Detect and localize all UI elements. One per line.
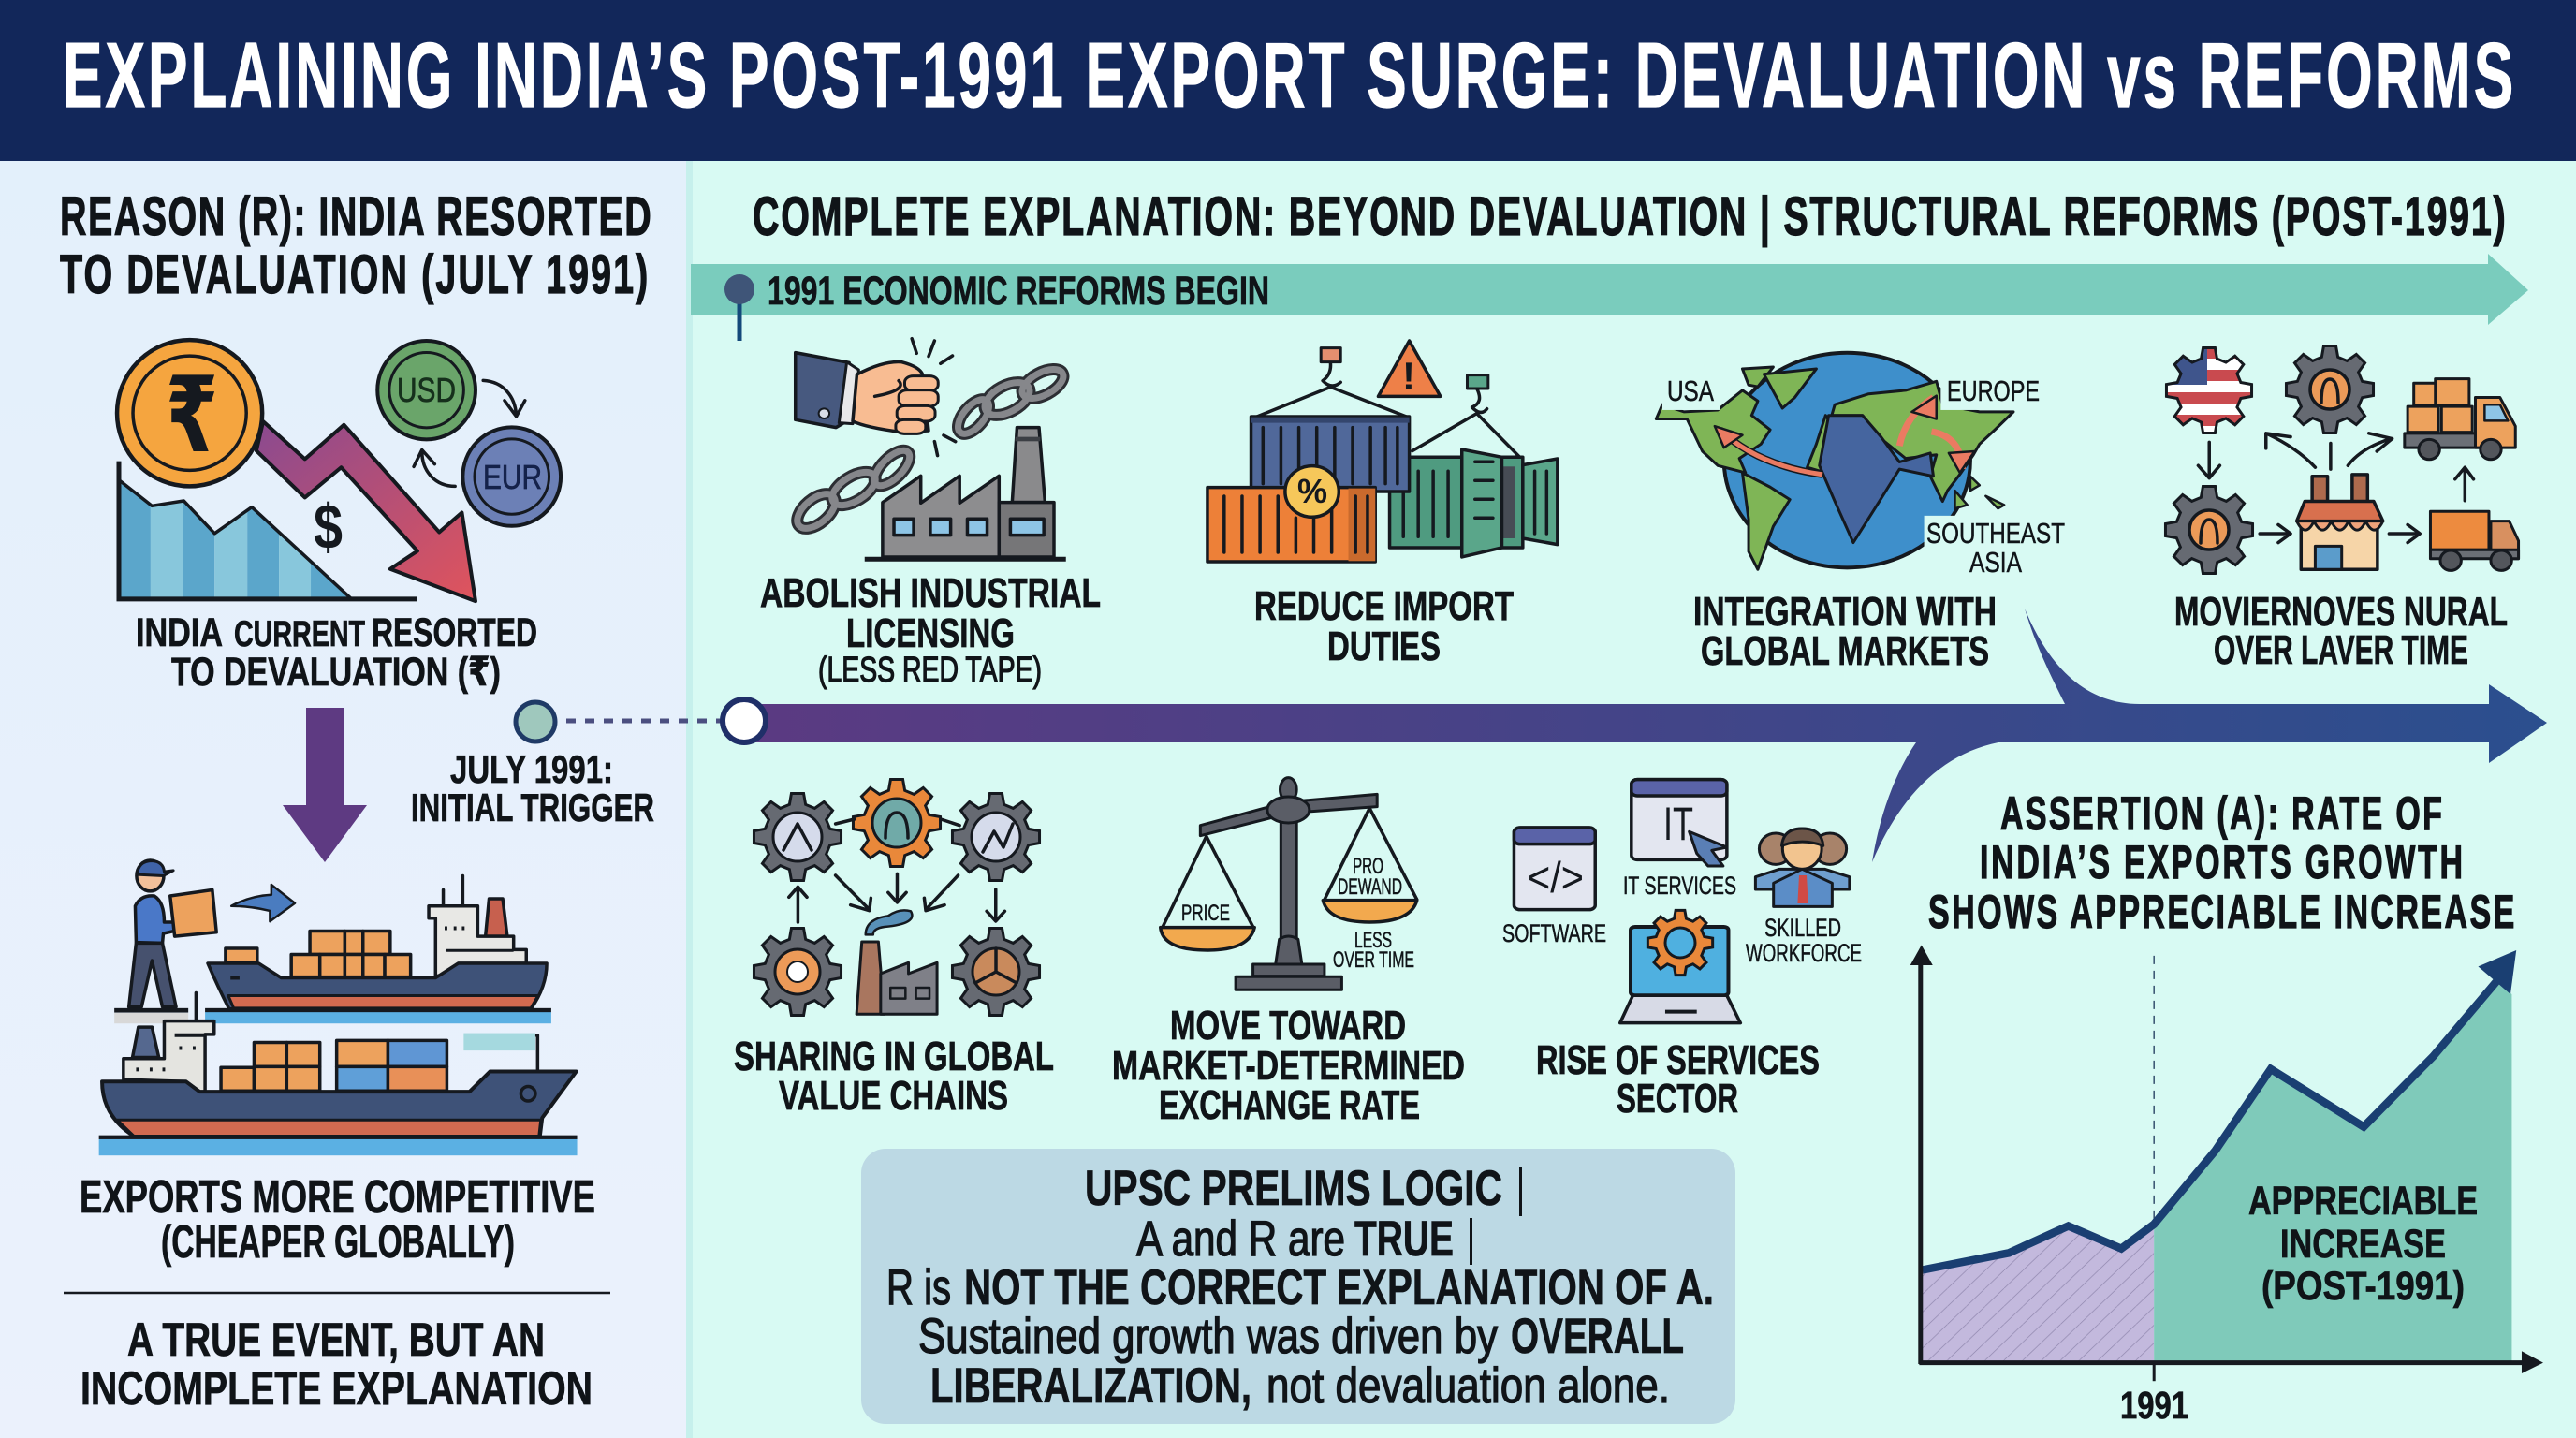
panel: assertion: [1910, 788, 2543, 1427]
label: GLOBAL MARKETS: [1701, 628, 1989, 674]
label: [2174, 589, 2508, 673]
label: india resorted to devaluation: TO DEVALUATION (₹): [171, 650, 501, 695]
label: ABOLISH INDUSTRIAL: [760, 570, 1101, 616]
label: INTEGRATION WITH: [1693, 589, 1997, 635]
icon: fist breaking chain and factory: [791, 339, 1068, 559]
icon: falling rupee chart: $: [314, 492, 343, 563]
heading: assertion: [1928, 788, 2514, 939]
label: EXCHANGE RATE: [1159, 1082, 1420, 1128]
chart: export growth area chart: [1910, 945, 2543, 1427]
icon: balance scale: LESS: [1354, 928, 1392, 953]
label: SHARING IN GLOBAL: [734, 1034, 1054, 1079]
icon: software, IT, workforce and laptop: IT: [1663, 798, 1693, 850]
label: july 1991 initial trigger: JULY 1991:: [450, 747, 613, 791]
reform: integration with global markets: [1656, 353, 2067, 674]
label: exports more competitive: (CHEAPER GLOBALLY): [161, 1217, 515, 1268]
arrow: 1991 economic reforms timeline: 1991 ECONOMIC REFORMS BEGIN: [768, 269, 1269, 314]
label: RISE OF SERVICES: [1536, 1037, 1820, 1083]
icon: falling rupee chart: USD: [397, 371, 456, 409]
label: MARKET-DETERMINED: [1112, 1043, 1465, 1089]
icon: software, IT, workforce and laptop: SKILLED: [1764, 914, 1841, 942]
icon: globe with trade arrows: USA: [1667, 374, 1714, 407]
reform: supply network over time: [2162, 345, 2519, 673]
icon: worker and cargo ships: [99, 860, 578, 1155]
heading: assertion: ASSERTION (A): RATE OF: [2000, 788, 2442, 841]
label: [1693, 589, 1997, 674]
icon: software, IT, workforce and laptop: IT SERVICES: [1623, 872, 1736, 900]
arrow: devaluation to exports: [283, 708, 367, 862]
icon: balance scale: PRO: [1353, 854, 1383, 879]
icon: globe with trade arrows: [1656, 353, 2067, 579]
chart: export growth area chart: (POST-1991): [2261, 1264, 2465, 1309]
conclusion text: incomplete explanation: A TRUE EVENT, BUT AN: [127, 1313, 545, 1366]
label: LICENSING: [846, 610, 1015, 656]
callout: UPSC prelims logic: TRUE: [1354, 1211, 1454, 1267]
icon: software, IT, workforce and laptop: SOFTWARE: [1502, 919, 1606, 947]
label: [1112, 1003, 1465, 1128]
icon: falling rupee chart: EUR: [483, 458, 542, 496]
panel: reason (left column): [0, 161, 693, 1438]
label: VALUE CHAINS: [779, 1073, 1008, 1119]
label: [760, 570, 1101, 690]
reform: market-determined exchange rate: [1112, 778, 1465, 1128]
callout: UPSC prelims logic: NOT THE CORRECT EXPLANATION OF A.: [964, 1260, 1714, 1315]
title banner: EXPLAINING INDIA’S POST-1991 EXPORT SURGE: DEVALUATION vs REFORMS: [63, 23, 2513, 126]
label: july 1991 initial trigger: INITIAL TRIGGER: [411, 785, 654, 829]
label: india resorted to devaluation: RESORTED: [372, 610, 537, 655]
label: [734, 1034, 1054, 1119]
icon: software, IT, workforce and laptop: [1502, 780, 1862, 1023]
reform: sharing in global value chains: [734, 779, 1054, 1119]
label: SECTOR: [1617, 1076, 1738, 1122]
label: india resorted to devaluation: CURRENT: [234, 614, 365, 654]
callout: UPSC prelims logic: A and R are: [1136, 1211, 1345, 1267]
connector: dashed link from initial trigger: [516, 702, 721, 741]
callout: UPSC prelims logic: UPSC PRELIMS LOGIC: [1085, 1161, 1502, 1216]
icon: balance scale: OVER TIME: [1333, 947, 1414, 973]
callout: UPSC prelims logic: LIBERALIZATION,: [930, 1358, 1251, 1414]
icon: containers with duty badge: !: [1402, 354, 1415, 398]
arrow: 1991 economic reforms timeline: [691, 254, 2528, 341]
label: india resorted to devaluation: [136, 610, 537, 695]
chart: export growth area chart: INCREASE: [2280, 1222, 2446, 1267]
callout: UPSC prelims logic: Sustained growth was driven by: [918, 1309, 1498, 1364]
top ship: [205, 875, 551, 1023]
reform: rise of services sector: [1502, 780, 1862, 1122]
icon: falling rupee chart: [117, 340, 561, 601]
icon: balance scale: DEWAND: [1338, 874, 1402, 900]
label: july 1991 initial trigger: [411, 747, 654, 829]
icon: value-chain gears and factory: [754, 779, 1040, 1016]
icon: software, IT, workforce and laptop: </>: [1528, 853, 1584, 902]
callout: UPSC prelims logic: OVERALL: [1511, 1309, 1684, 1364]
icon: falling rupee chart: ₹: [166, 357, 218, 474]
callout: UPSC prelims logic: not devaluation alone.: [1266, 1358, 1670, 1414]
label: REDUCE IMPORT: [1254, 583, 1514, 629]
heading: reason: [60, 185, 651, 305]
icon: globe with trade arrows: EUROPE: [1947, 374, 2040, 407]
icon: globe with trade arrows: SOUTHEAST: [1926, 517, 2065, 550]
worker: [129, 860, 216, 1007]
chart: export growth area chart: APPRECIABLE: [2248, 1179, 2478, 1224]
heading: reason: TO DEVALUATION (JULY 1991): [60, 243, 648, 305]
heading: reason: REASON (R): INDIA RESORTED: [60, 185, 651, 247]
conclusion text: incomplete explanation: INCOMPLETE EXPLANATION: [80, 1362, 593, 1415]
conclusion text: incomplete explanation: [80, 1313, 593, 1415]
label: exports more competitive: [80, 1172, 595, 1268]
arrow: main reform timeline with branches: [723, 609, 2547, 862]
heading: assertion: SHOWS APPRECIABLE INCREASE: [1928, 887, 2514, 939]
icon: containers with duty badge: %: [1297, 472, 1327, 510]
callout: UPSC prelims logic: [861, 1149, 1735, 1424]
icon: software, IT, workforce and laptop: WORKFORCE: [1746, 939, 1862, 967]
reform: reduce import duties: [1208, 341, 1558, 669]
icon: balance scale: PRICE: [1181, 901, 1230, 926]
icon: flag gear, gears, shop and trucks: [2162, 345, 2519, 574]
label: DUTIES: [1327, 624, 1441, 669]
label: india resorted to devaluation: INDIA: [136, 610, 223, 655]
label: exports more competitive: EXPORTS MORE COMPETITIVE: [80, 1172, 595, 1223]
label: (LESS RED TAPE): [818, 651, 1042, 690]
icon: globe with trade arrows: ASIA: [1969, 546, 2022, 579]
label: [1536, 1037, 1820, 1122]
label: [1254, 583, 1514, 669]
heading: assertion: INDIA’S EXPORTS GROWTH: [1980, 837, 2463, 889]
chart: export growth area chart: 1991: [2120, 1384, 2188, 1427]
heading: complete explanation: COMPLETE EXPLANATION: BEYOND DEVALUATION | STRUCTURAL REFORMS (POST-1991): [753, 185, 2506, 248]
icon: containers with duty badge: [1208, 341, 1558, 562]
icon: balance scale: [1161, 778, 1417, 990]
label: MOVE TOWARD: [1170, 1003, 1406, 1049]
reform: abolish industrial licensing: [760, 339, 1101, 690]
bottom ship: [99, 992, 578, 1155]
title banner: [0, 0, 2576, 161]
callout: UPSC prelims logic: R is: [886, 1260, 951, 1315]
